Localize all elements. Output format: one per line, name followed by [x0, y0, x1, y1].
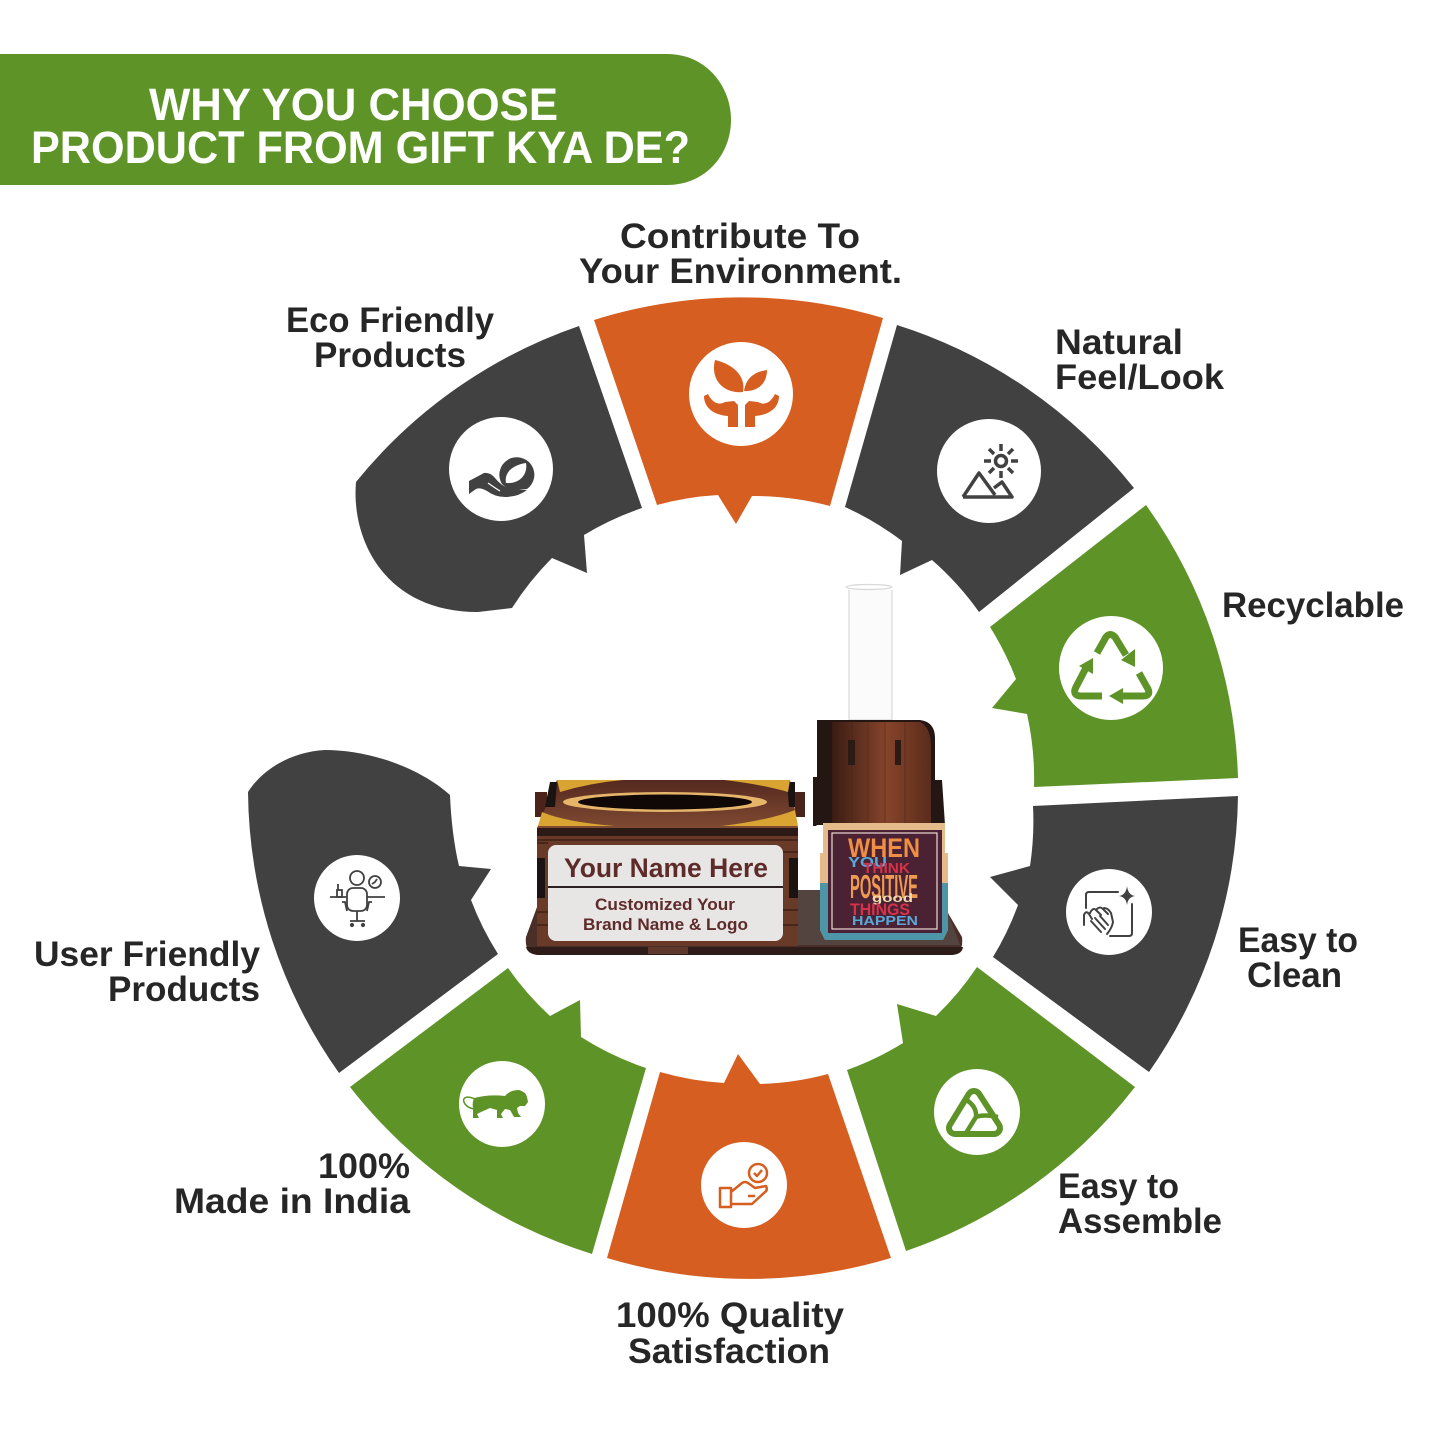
- name plate: Customized Your: [595, 896, 736, 914]
- label: quality satisfaction: [616, 1296, 845, 1371]
- poster card: HAPPEN: [852, 913, 918, 928]
- segment: easy to clean: [990, 796, 1238, 1072]
- base board: [526, 890, 963, 955]
- segment: 100% quality satisfaction: [607, 1054, 891, 1279]
- poster card: THINGS: [850, 900, 910, 919]
- label: easy to clean: Clean: [1247, 956, 1342, 995]
- icon: hand with badge: [720, 1164, 767, 1207]
- label: made in india: [174, 1147, 411, 1221]
- label: quality satisfaction: 100% Quality: [616, 1296, 845, 1335]
- segment: contribute to your environment: [594, 297, 883, 524]
- segment: user friendly products: [248, 750, 498, 1073]
- title banner: [0, 54, 731, 185]
- label: eco friendly products: [286, 301, 495, 375]
- icon: recycle arrows: [1075, 634, 1149, 704]
- poster card: [828, 830, 942, 933]
- label: user friendly products: User Friendly: [34, 935, 261, 974]
- label: made in india: Made in India: [174, 1182, 411, 1221]
- icon: sun and mountains: [963, 444, 1018, 497]
- label: recyclable: Recyclable: [1222, 586, 1404, 625]
- label: contribute to your environment: Contribute To: [620, 217, 860, 256]
- tissue box: [535, 780, 805, 946]
- name plate: [548, 845, 783, 941]
- product: desk organizer: [526, 584, 963, 955]
- label: made in india: 100%: [318, 1147, 410, 1186]
- label: easy to assemble: [1058, 1167, 1222, 1241]
- label: easy to clean: Easy to: [1238, 921, 1358, 960]
- label: quality satisfaction: Satisfaction: [628, 1332, 830, 1371]
- icon: hand wiping: [1084, 886, 1135, 936]
- poster card: THINK: [863, 860, 910, 877]
- label: easy to clean: [1238, 921, 1358, 995]
- label: eco friendly products: Products: [314, 336, 466, 375]
- pen stand: [813, 720, 948, 940]
- glass test tube: [846, 584, 892, 720]
- label: easy to assemble: Assemble: [1058, 1202, 1222, 1241]
- label: user friendly products: Products: [108, 970, 260, 1009]
- title banner: WHY YOU CHOOSE: [149, 79, 558, 130]
- icon: rounded triangle: [955, 1097, 998, 1133]
- label: user friendly products: [34, 935, 261, 1009]
- segment: eco friendly products: [356, 326, 642, 612]
- name plate: Your Name Here: [564, 853, 768, 883]
- segment: recyclable: [990, 505, 1238, 787]
- title banner: PRODUCT FROM GIFT KYA DE?: [31, 122, 690, 173]
- icon: hand holding leaf: [469, 457, 534, 497]
- name plate: Brand Name & Logo: [583, 916, 748, 934]
- poster card: good: [872, 891, 913, 905]
- poster card: YOU: [848, 854, 887, 871]
- label: natural feel/look: Feel/Look: [1055, 358, 1225, 397]
- label: natural feel/look: [1055, 323, 1225, 397]
- segment: 100% made in india: [350, 968, 646, 1254]
- label: eco friendly products: Eco Friendly: [286, 301, 495, 340]
- label: easy to assemble: Easy to: [1058, 1167, 1179, 1206]
- icon: person on chair: [330, 871, 385, 926]
- icon: lion: [464, 1090, 528, 1118]
- label: contribute to your environment: Your Environment.: [579, 252, 902, 291]
- poster card: POSITIVE: [850, 868, 918, 905]
- segment: easy to assemble: [847, 967, 1135, 1251]
- segment: natural feel/look: [845, 325, 1134, 612]
- icon: hands and leaves: [704, 360, 779, 427]
- label: natural feel/look: Natural: [1055, 323, 1183, 362]
- label: contribute to your environment: [579, 217, 902, 291]
- poster card: WHEN: [848, 833, 920, 863]
